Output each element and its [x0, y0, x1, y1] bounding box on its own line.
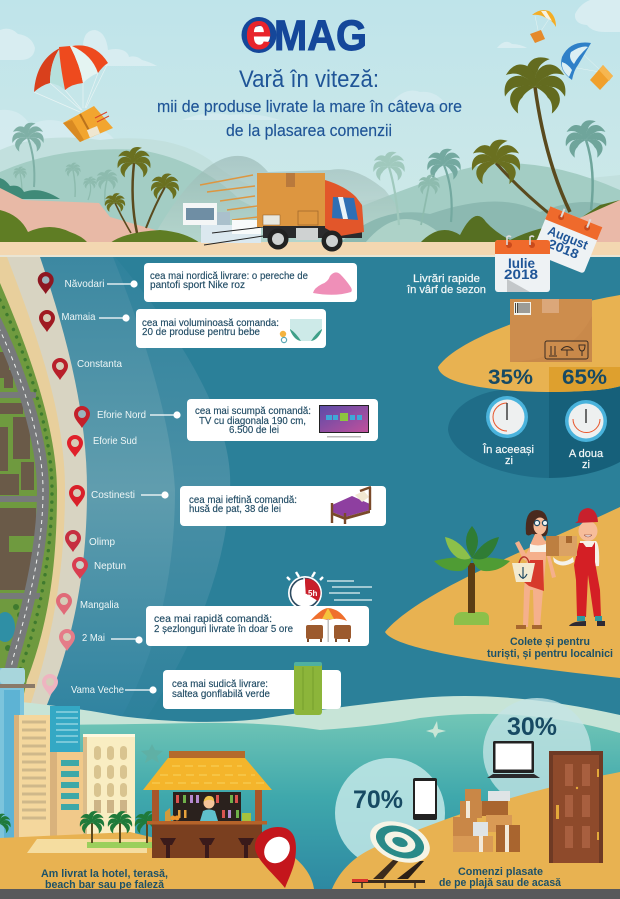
card text: pantofi sport Nike roz — [150, 279, 245, 291]
lower right island — [385, 507, 620, 678]
icon: diaper — [290, 319, 322, 341]
smile — [584, 535, 592, 537]
palm — [65, 162, 81, 197]
card: southernmost delivery — [163, 662, 341, 715]
hands — [553, 557, 574, 566]
pin: Neptun — [72, 557, 88, 579]
pin: Constanta — [52, 358, 68, 380]
left hotels — [0, 668, 135, 840]
card text — [142, 317, 279, 338]
subtitle — [157, 98, 462, 140]
dark streaks — [204, 227, 263, 245]
chassis — [263, 226, 362, 238]
head — [578, 521, 598, 541]
beach bar — [143, 751, 272, 858]
big red pin — [255, 827, 296, 888]
beach bag — [512, 557, 535, 582]
right bottom circles — [335, 698, 591, 868]
green palm — [434, 526, 510, 625]
yellow sand — [0, 257, 65, 712]
road center line — [0, 320, 43, 680]
card: fastest order — [146, 572, 372, 646]
beach umbrella and loungers — [352, 814, 436, 888]
label same day: zi — [505, 455, 513, 467]
tape — [286, 173, 295, 187]
glass tower — [0, 668, 35, 840]
orange building — [50, 752, 83, 840]
canopy — [34, 45, 108, 92]
palm left 3 — [105, 192, 131, 233]
dark shadow left — [448, 390, 549, 478]
calendar Iulie: Iulie — [508, 255, 535, 271]
card text: cea mai nordică livrare: o pereche de — [150, 270, 308, 282]
parcel stack — [453, 789, 520, 852]
green mountains — [0, 149, 620, 245]
clouds — [0, 0, 620, 160]
card: northernmost delivery — [144, 263, 357, 302]
darker sand segment — [549, 367, 620, 392]
calendar August — [532, 204, 603, 274]
red skirt — [524, 560, 544, 591]
outer shallow water — [0, 257, 230, 720]
label Eforie Sud: Eforie Sud — [93, 435, 137, 447]
promenade — [27, 839, 147, 853]
white building behind truck — [183, 203, 261, 243]
torso and legs — [523, 534, 547, 627]
logo — [242, 3, 367, 61]
starfish left — [141, 744, 163, 763]
barcode — [514, 302, 531, 315]
pin: Navodari — [38, 272, 54, 294]
label Navodari: Năvodari — [64, 278, 104, 290]
label — [263, 215, 280, 225]
fruit on counter — [165, 808, 251, 821]
sea wave band — [0, 696, 620, 899]
label Eforie Nord: Eforie Nord — [97, 409, 146, 421]
palm — [427, 147, 461, 222]
medium palm right — [472, 138, 552, 216]
coastline — [0, 257, 87, 712]
palm — [96, 169, 118, 205]
speed lines — [327, 581, 372, 600]
pin: Mangalia — [56, 593, 72, 615]
palm — [566, 119, 606, 210]
icon: TV — [319, 405, 369, 438]
pink cliff left — [0, 188, 170, 243]
courier man — [546, 508, 605, 626]
caption: hotel and beach bar — [41, 868, 168, 891]
calendar Iulie: 2018 — [504, 266, 538, 282]
bottom grey bar — [0, 889, 620, 899]
hedge — [87, 842, 153, 848]
sea — [0, 257, 620, 899]
logo MAG: MAG — [274, 12, 367, 60]
percent 65: 65% — [562, 366, 607, 389]
card text — [154, 613, 293, 635]
blue building — [50, 706, 80, 756]
small green palm 1 — [80, 810, 104, 843]
handling icons — [545, 341, 588, 359]
card: cheapest order — [180, 486, 386, 526]
card text: saltea gonflabilă verde — [172, 688, 270, 700]
icon: phone — [413, 778, 437, 820]
card text — [150, 270, 308, 291]
label 2 Mai: 2 Mai — [82, 632, 105, 644]
clock next day — [565, 400, 607, 442]
city blocks — [0, 352, 46, 651]
posts — [152, 790, 262, 858]
label Neptun: Neptun — [94, 560, 126, 572]
parcel handed over — [546, 536, 577, 556]
card: most expensive order — [187, 399, 378, 441]
calendar Iulie — [495, 236, 550, 292]
cap — [575, 508, 598, 523]
sea foam line — [0, 255, 620, 257]
percent 70: 70% — [353, 786, 403, 814]
caption: tourists and locals: turiști, și pentru localnici — [487, 648, 613, 660]
shoes — [569, 621, 605, 626]
white top — [530, 544, 546, 552]
handling mark — [298, 211, 318, 225]
label: fast deliveries: în vârf de sezon — [406, 284, 486, 296]
inner shallow water — [0, 257, 175, 720]
label same day: În aceeași — [482, 443, 534, 456]
logo e: e — [245, 3, 272, 61]
cargo box — [257, 173, 325, 227]
right island with box — [438, 295, 620, 478]
small green palm 3 — [135, 810, 159, 843]
palm left 1 — [117, 146, 151, 233]
card text: 2 șezlonguri livrate în doar 5 ore — [154, 623, 293, 635]
sand strip — [0, 242, 620, 256]
subtitle: mii de produse livrate la mare în câteva ore — [157, 98, 462, 116]
caption: hotel and beach bar: Am livrat la hotel, terasă, — [41, 868, 168, 880]
pin: 2 Mai — [59, 629, 75, 651]
arms — [515, 541, 556, 578]
face — [534, 518, 546, 534]
location labels — [62, 278, 146, 696]
caption: orders from beach or home: de pe plajă sau de acasă — [439, 877, 562, 889]
card text — [172, 678, 270, 700]
subtitle: de la plasarea comenzii — [226, 122, 392, 140]
icon: pacifier — [280, 331, 287, 343]
card text: cea mai sudică livrare: — [172, 678, 268, 690]
sand island — [438, 295, 620, 392]
label Olimp: Olimp — [89, 536, 115, 548]
cab — [325, 180, 364, 236]
sand left bottom — [0, 832, 314, 889]
windshield — [332, 197, 358, 220]
palm — [83, 176, 97, 200]
starfish right — [426, 721, 446, 738]
green strip — [0, 283, 57, 712]
counter — [152, 824, 262, 858]
card text: cea mai scumpă comandă: — [195, 405, 311, 417]
card text: husă de pat, 38 de lei — [189, 503, 281, 515]
pin: Olimp — [65, 530, 81, 552]
cream striped building — [14, 715, 50, 839]
card text: 20 de produse pentru bebe — [142, 326, 260, 338]
icon: bed — [332, 487, 371, 524]
connector lines — [99, 280, 181, 694]
wheels — [268, 228, 342, 252]
title: Vară în viteză: — [239, 66, 379, 93]
large palm right — [504, 55, 570, 212]
bartender — [200, 796, 218, 821]
label: fast deliveries: Livrări rapide — [413, 273, 480, 285]
caption: tourists and locals — [487, 636, 613, 660]
arched building — [83, 734, 135, 839]
parcel — [63, 106, 113, 142]
tourist woman — [512, 510, 556, 629]
percent 35: 35% — [488, 366, 533, 389]
pale hill — [365, 219, 450, 243]
card text: TV cu diagonala 190 cm, — [199, 415, 306, 427]
palm — [418, 174, 440, 225]
umbrella — [364, 814, 436, 870]
label: fast deliveries — [406, 273, 486, 296]
lower mountains right — [340, 201, 620, 245]
card text: cea mai voluminoasă comanda: — [142, 317, 279, 329]
shrubs right — [420, 200, 620, 243]
small palm edge — [0, 813, 11, 833]
bush dots — [0, 300, 52, 670]
card text — [195, 405, 311, 436]
pin: Mamaia — [39, 310, 55, 332]
hair — [526, 510, 548, 536]
motion lines — [200, 175, 258, 220]
card: largest order — [136, 309, 326, 348]
teal shrubs left — [0, 178, 60, 199]
cardboard box — [510, 299, 592, 362]
distant pale palms — [12, 119, 606, 225]
strings — [34, 63, 108, 112]
lagoon gradient — [0, 714, 620, 899]
icon: laptop — [487, 741, 540, 778]
palm — [12, 121, 44, 187]
sky background — [0, 0, 620, 246]
pin: Vama Veche — [42, 674, 58, 696]
caption: tourists and locals: Colete și pentru — [510, 636, 590, 648]
pale sand — [0, 257, 87, 712]
stopwatch: 5h — [308, 589, 317, 598]
pin: Costinesti — [69, 485, 85, 507]
dark shadow right — [549, 387, 620, 478]
pin: Eforie Nord — [74, 406, 90, 428]
caption: orders from beach or home — [439, 866, 562, 889]
label same day — [482, 443, 534, 467]
card text: cea mai ieftină comandă: — [189, 494, 297, 506]
loungers — [352, 857, 425, 888]
sunglasses — [534, 520, 548, 526]
label Mamaia: Mamaia — [62, 311, 96, 323]
calendar August: August — [546, 223, 591, 253]
percent 30: 30% — [507, 713, 557, 741]
label next day: A doua — [569, 448, 604, 460]
label next day: zi — [582, 459, 590, 471]
door — [549, 751, 603, 863]
card text — [189, 494, 297, 515]
label Mangalia: Mangalia — [80, 599, 119, 611]
sand right bottom — [332, 772, 620, 889]
card text: cea mai rapidă comandă: — [154, 613, 272, 625]
socks — [577, 616, 602, 621]
palm left 2 — [146, 172, 179, 228]
road — [0, 320, 43, 680]
icon: pink sneaker — [313, 272, 352, 295]
white shirt — [580, 541, 599, 567]
palm — [373, 150, 405, 225]
delivery truck — [183, 173, 364, 252]
card text: 6.500 de lei — [229, 424, 279, 436]
olive bushes left — [0, 210, 200, 243]
parachute with parcel — [34, 45, 113, 142]
clock same day — [486, 396, 528, 438]
small green palm 2 — [108, 810, 132, 843]
back wall with shelves — [173, 792, 241, 822]
small blue parachute — [561, 43, 613, 90]
palm — [13, 166, 27, 192]
calendar August: 2018 — [546, 236, 581, 262]
label Costinesti: Costinesti — [91, 489, 135, 501]
label Vama Veche: Vama Veche — [71, 684, 124, 696]
sandals — [516, 625, 542, 629]
overalls — [574, 542, 601, 617]
icon: umbrella and sun loungers — [306, 608, 351, 642]
roof — [143, 751, 272, 790]
label next day — [569, 448, 604, 471]
stopwatch — [287, 572, 323, 610]
small yellow parachute — [530, 10, 556, 43]
stools — [160, 838, 254, 858]
pin: Eforie Sud — [67, 435, 83, 457]
grey-green haze behind truck — [150, 156, 420, 243]
label Constanta: Constanta — [77, 358, 122, 370]
caption: orders from beach or home: Comenzi plasate — [458, 866, 543, 878]
counter top — [147, 821, 267, 824]
hazy background hills — [0, 138, 620, 245]
icon: green air mattress — [294, 662, 322, 715]
pink cliff right — [530, 200, 620, 243]
caption: hotel and beach bar: beach bar sau pe faleză — [45, 879, 165, 891]
